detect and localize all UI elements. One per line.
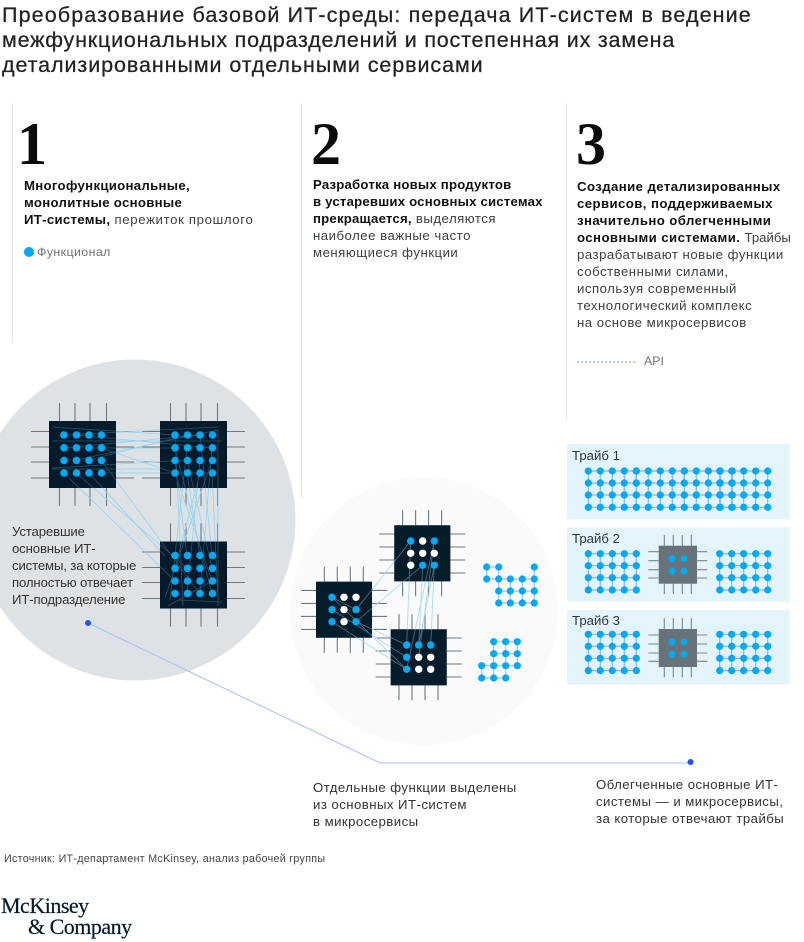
circle: separated functions <box>290 477 558 745</box>
column divider lines <box>12 103 566 498</box>
tribe 3 label: Трайб 3 <box>572 613 620 628</box>
microservices cluster: upper <box>483 563 538 607</box>
label: separated functions: из основных ИТ-систем <box>313 797 467 812</box>
step 3 text: собственными силами, <box>577 264 729 279</box>
label: separated functions <box>313 780 517 829</box>
label: light core systems: Облегченные основные ИТ- <box>596 777 778 792</box>
source note: Источник: ИТ-департамент McKinsey, анализ рабочей группы <box>4 853 325 865</box>
microservices cluster: lower <box>478 638 521 682</box>
legend dot: function <box>24 247 34 257</box>
label: legacy systems: ИТ-подразделение <box>12 592 125 607</box>
step 3 text: разрабатывают новые функции <box>577 247 784 262</box>
logo: McKinsey & Company: McKinsey <box>1 893 89 918</box>
step 1 text <box>24 178 253 226</box>
label: legacy systems: системы, за которые <box>12 558 136 573</box>
step 3 text: основными системами. Трайбы <box>577 230 791 245</box>
step 3 text: используя современный <box>577 281 737 296</box>
step number 1: 1 <box>17 111 47 177</box>
step 2 text: Разработка новых продуктов <box>313 176 511 192</box>
label: legacy systems: основные ИТ- <box>12 541 95 556</box>
label: light core systems <box>596 777 784 826</box>
panel: tribe 1 <box>567 444 790 519</box>
step 3 text: значительно облегченными <box>577 213 771 228</box>
panel: tribe 3 <box>567 610 790 684</box>
step 1 text: ИТ-системы, пережиток прошлого <box>24 212 253 226</box>
label: separated functions: Отдельные функции выделены <box>313 780 517 795</box>
step 3 text: сервисов, поддерживаемых <box>577 196 773 211</box>
chip group: chips with extracted functions <box>301 510 465 700</box>
step 2 text: меняющиеся функции <box>313 244 458 260</box>
legend line: API <box>577 361 637 363</box>
title: Преобразование базовой ИТ-среды: передача ИТ-систем в ведение <box>2 3 752 27</box>
title <box>2 3 752 77</box>
panel: tribe 2 <box>567 527 790 602</box>
step 1 text: Многофункциональные, <box>24 178 190 192</box>
step number 3: 3 <box>576 111 606 177</box>
logo: McKinsey & Company <box>1 893 132 939</box>
step 2 text: наиболее важные часто <box>313 228 471 242</box>
label: legacy systems <box>12 524 136 607</box>
label: light core systems: за которые отвечают трайбы <box>596 811 784 826</box>
label: light core systems: системы — и микросервисы, <box>596 794 783 809</box>
chip group: legacy monoliths with dense links <box>31 403 245 626</box>
logo: McKinsey & Company: & Company <box>28 914 132 939</box>
circle: legacy systems <box>0 360 296 680</box>
step 3 text: технологический комплекс <box>577 298 752 313</box>
tribe 2 label: Трайб 2 <box>572 530 620 546</box>
step 3 text: Создание детализированных <box>577 179 781 194</box>
title: детализированными отдельными сервисами <box>2 53 484 77</box>
legend label: API: API <box>644 354 664 368</box>
step 2 text <box>313 176 543 260</box>
step number 2: 2 <box>311 111 341 177</box>
label: legacy systems: полностью отвечает <box>12 575 133 590</box>
legend label: function: Функционал <box>37 245 111 259</box>
step 1 text: монолитные основные <box>24 194 182 210</box>
tribe 1 label: Трайб 1 <box>572 448 620 463</box>
step 2 text: прекращается, выделяются <box>313 210 496 226</box>
step 2 text: в устаревших основных системах <box>313 194 543 208</box>
connector with callout dots <box>85 620 694 765</box>
title: межфункциональных подразделений и постепенная их замена <box>2 28 675 52</box>
label: legacy systems: Устаревшие <box>12 524 85 538</box>
label: separated functions: в микросервисы <box>313 814 419 829</box>
step 3 text <box>577 179 791 330</box>
step 3 text: на основе микросервисов <box>577 315 747 330</box>
